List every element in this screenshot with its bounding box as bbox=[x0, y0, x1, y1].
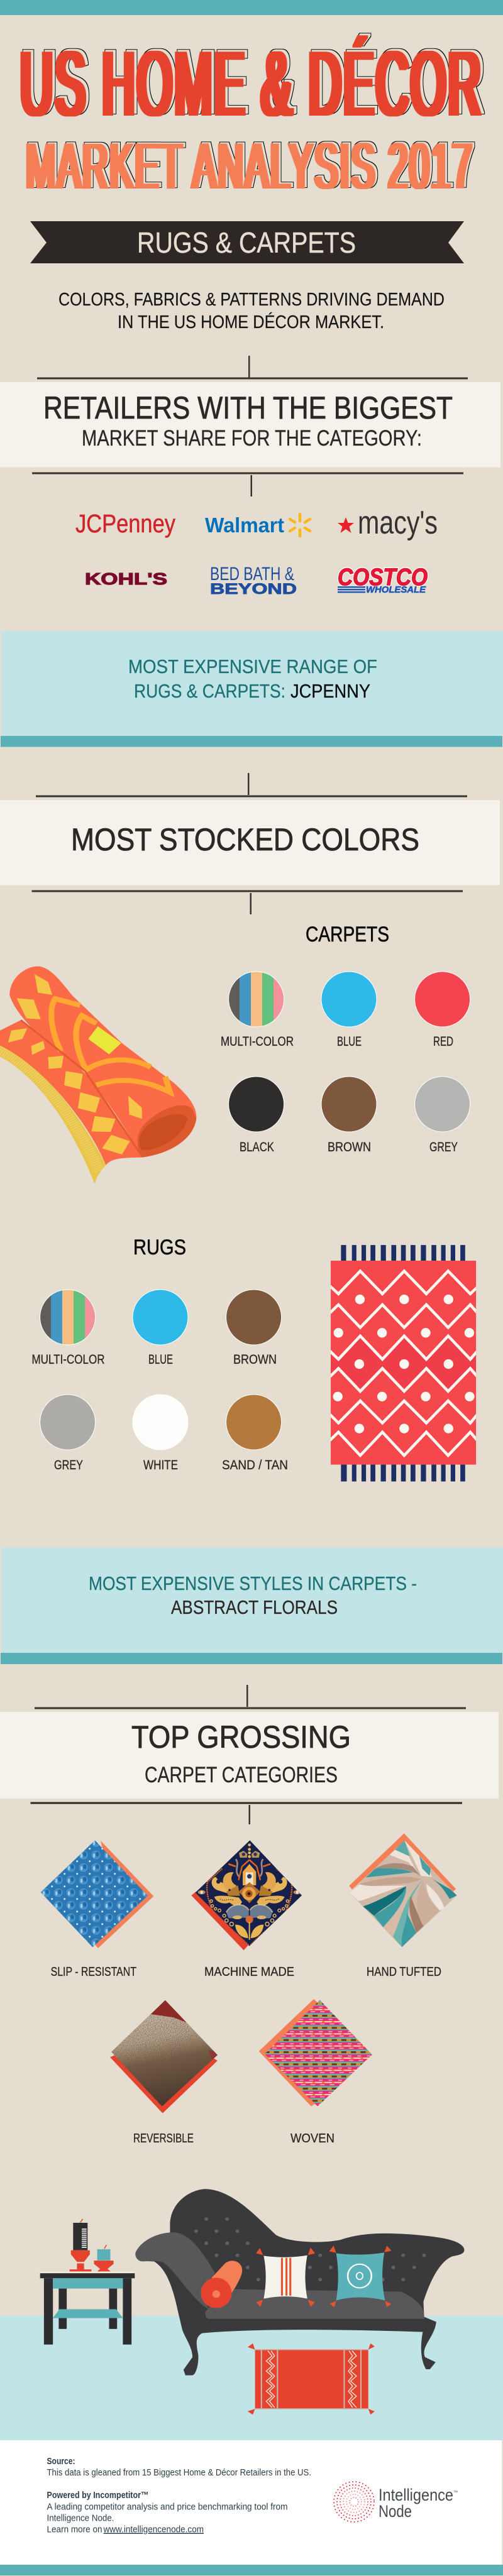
callout: most expensive styles bbox=[1, 1547, 503, 1664]
swatch: brown: BROWN bbox=[233, 1352, 277, 1367]
sofa arm bbox=[135, 2232, 215, 2310]
swatch: red: RED bbox=[433, 1034, 453, 1049]
category: woven bbox=[259, 1999, 372, 2146]
top teal bar bbox=[0, 0, 503, 15]
illustration: chaise sofa bbox=[135, 2189, 464, 2376]
source text: Learn more on bbox=[47, 2525, 102, 2535]
section header: most stocked colors: MOST STOCKED COLORS bbox=[71, 822, 419, 857]
intro text: COLORS, FABRICS & PATTERNS DRIVING DEMAND bbox=[58, 290, 445, 310]
logo: Walmart: Walmart bbox=[205, 513, 284, 537]
carpet color swatches bbox=[221, 972, 470, 1154]
swatch: red bbox=[415, 972, 470, 1049]
swatch: grey bbox=[415, 1077, 470, 1154]
callout: most expensive styles: MOST EXPENSIVE STYLES IN CARPETS - bbox=[89, 1572, 417, 1594]
swatch: black bbox=[229, 1077, 284, 1154]
logo: Bed Bath and Beyond bbox=[210, 564, 297, 598]
logo: Bed Bath and Beyond: BEYOND bbox=[210, 581, 297, 598]
category: reversible: REVERSIBLE bbox=[133, 2132, 194, 2146]
swatch: sand tan bbox=[222, 1395, 288, 1472]
logo: Kohl's: KOHL'S bbox=[85, 569, 167, 588]
swatch: blue: BLUE bbox=[337, 1034, 362, 1049]
swatch: brown bbox=[321, 1077, 377, 1154]
section header: top grossing bbox=[0, 1685, 499, 1824]
section header: retailers: MARKET SHARE FOR THE CATEGORY: bbox=[82, 426, 422, 451]
illustration: rolled carpet bbox=[0, 967, 196, 1184]
callout: most expensive range: MOST EXPENSIVE RANGE OF bbox=[128, 655, 377, 677]
swatch: blue bbox=[133, 1290, 188, 1367]
source text bbox=[47, 2457, 311, 2535]
rug color swatches bbox=[31, 1290, 288, 1472]
callout: most expensive range: RUGS & CARPETS: bbox=[134, 680, 285, 702]
source text: Powered by Incompetitor™ bbox=[47, 2491, 148, 2501]
illustration: side table and candles bbox=[40, 2219, 135, 2345]
logo: Bed Bath and Beyond: BED BATH & bbox=[210, 564, 294, 584]
diamonds bbox=[8, 974, 142, 1154]
rug fringe bbox=[341, 1245, 465, 1481]
swatch: white bbox=[132, 1394, 189, 1472]
roll body bbox=[9, 967, 196, 1157]
source text: A leading competitor analysis and price benchmarking tool from bbox=[47, 2502, 288, 2513]
source text: This data is gleaned from 15 Biggest Home & Décor Retailers in the US. bbox=[47, 2468, 311, 2478]
swatch: multi-color: MULTI-COLOR bbox=[221, 1034, 294, 1049]
bolster cushion bbox=[201, 2261, 242, 2308]
logo: Macy's bbox=[338, 505, 438, 541]
section header: top grossing: CARPET CATEGORIES bbox=[145, 1763, 338, 1787]
Intelligence Node logo: Intelligence bbox=[379, 2486, 453, 2504]
short candle bbox=[94, 2245, 114, 2271]
callout: most expensive range bbox=[1, 631, 503, 747]
logo: Costco Wholesale: COSTCO bbox=[338, 564, 428, 591]
source text: Source: bbox=[47, 2457, 75, 2467]
category: slip resistant bbox=[38, 1837, 153, 1979]
category: hand tufted: HAND TUFTED bbox=[367, 1965, 441, 1979]
logo: Macy's: macy's bbox=[358, 505, 438, 541]
Intelligence Node logo: Node bbox=[379, 2502, 412, 2521]
logo: JCPenney: JCPenney bbox=[75, 509, 175, 538]
roll end bbox=[138, 1105, 196, 1157]
category: reversible bbox=[109, 1998, 221, 2146]
swatch: grey: GREY bbox=[429, 1140, 458, 1154]
swatch: black: BLACK bbox=[240, 1140, 274, 1154]
swatch: white: WHITE bbox=[143, 1458, 178, 1472]
section header: most stocked colors bbox=[0, 773, 500, 914]
lower flap bbox=[0, 1020, 143, 1165]
chevrons bbox=[52, 999, 170, 1092]
swatch: blue bbox=[321, 972, 377, 1049]
section header: retailers bbox=[0, 356, 500, 496]
footer panel bbox=[0, 2440, 503, 2575]
category: machine made bbox=[191, 1839, 306, 1979]
section header: top grossing: TOP GROSSING bbox=[131, 1719, 351, 1755]
title bbox=[20, 33, 483, 203]
category: woven: WOVEN bbox=[290, 2132, 334, 2146]
swatch: grey: GREY bbox=[54, 1458, 83, 1472]
illustration: red zigzag rug bbox=[327, 1245, 480, 1481]
Intelligence Node logo: ™ bbox=[453, 2491, 458, 2495]
swatch: multi-color bbox=[221, 972, 294, 1049]
intro text: IN THE US HOME DÉCOR MARKET. bbox=[118, 312, 384, 332]
category: slip resistant: SLIP - RESISTANT bbox=[51, 1965, 136, 1979]
retailer logos bbox=[75, 505, 438, 598]
category: hand tufted bbox=[348, 1833, 459, 1979]
fringe bbox=[0, 1044, 106, 1184]
sofa frame bbox=[135, 2189, 464, 2376]
heading: carpets: CARPETS bbox=[306, 923, 389, 946]
category: machine made: MACHINE MADE bbox=[204, 1965, 294, 1979]
swatch: blue: BLUE bbox=[148, 1352, 173, 1367]
teal pillow bbox=[329, 2245, 391, 2307]
logo: Costco Wholesale: COSTCO bbox=[338, 564, 428, 591]
lime patch bbox=[88, 1026, 121, 1055]
tufting bbox=[194, 2217, 426, 2281]
ribbon banner: rugs and carpets bbox=[30, 221, 464, 263]
callout: most expensive range: JCPENNY bbox=[290, 680, 370, 702]
illustration: floor rug bbox=[248, 2343, 375, 2414]
source text: Intelligence Node. bbox=[47, 2514, 114, 2524]
floor band bbox=[0, 2316, 503, 2440]
swatch: multi-color: MULTI-COLOR bbox=[31, 1352, 104, 1367]
fold line bbox=[21, 1020, 143, 1157]
Intelligence Node logo bbox=[334, 2482, 458, 2522]
swatch: brown bbox=[226, 1290, 282, 1367]
intro text bbox=[58, 290, 445, 332]
sofa seat bbox=[206, 2289, 424, 2319]
swatch: sand tan: SAND / TAN bbox=[222, 1458, 288, 1472]
callout: most expensive styles: ABSTRACT FLORALS bbox=[171, 1596, 338, 1618]
tall candle bbox=[70, 2219, 91, 2271]
rug body bbox=[331, 1261, 476, 1465]
swatch: grey bbox=[40, 1395, 96, 1472]
logo: Costco Wholesale: WHOLESALE bbox=[366, 585, 426, 595]
zigzag pattern bbox=[327, 1271, 480, 1455]
source text: www.intelligencenode.com bbox=[103, 2525, 204, 2535]
ribbon banner: rugs and carpets: RUGS & CARPETS bbox=[137, 226, 356, 259]
swatch: brown: BROWN bbox=[328, 1140, 371, 1154]
white striped pillow bbox=[256, 2247, 315, 2307]
swatch: multi-color bbox=[31, 1290, 104, 1367]
heading: rugs: RUGS bbox=[133, 1236, 186, 1259]
